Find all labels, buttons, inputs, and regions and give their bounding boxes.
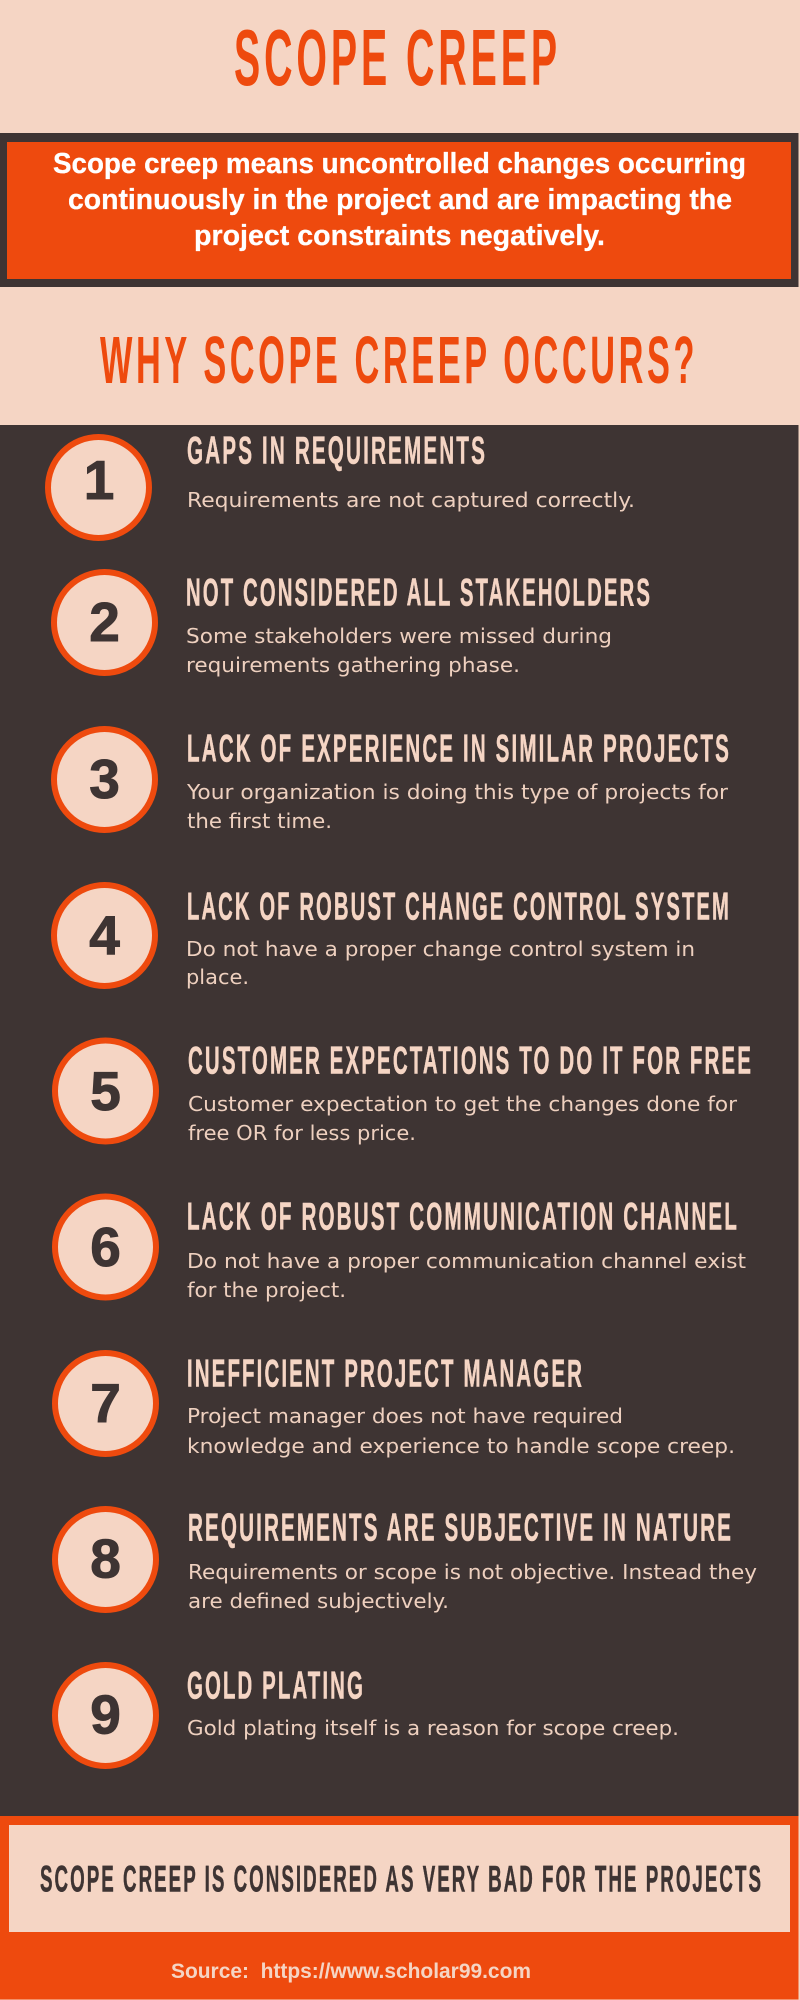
number badge 7	[55, 1353, 156, 1454]
description 5: Customer expectation to get the changes done for	[188, 1092, 738, 1116]
panel: causes	[0, 425, 798, 1816]
item 5	[55, 1039, 753, 1145]
heading 9: GOLD PLATING	[187, 1664, 365, 1707]
item 8	[55, 1506, 757, 1613]
number badge 5	[55, 1040, 156, 1142]
description 1: Requirements are not captured correctly.	[187, 488, 635, 512]
panel: definition: project constraints negatively.	[194, 220, 605, 252]
description 4: Do not have a proper change control system in	[186, 937, 695, 961]
number badge 2	[54, 572, 155, 673]
number badge 4	[54, 885, 155, 986]
number badge 6: 6	[90, 1216, 121, 1278]
number badge 5: 5	[90, 1060, 121, 1122]
description 3	[186, 780, 729, 833]
number badge 1: 1	[84, 449, 114, 511]
number badge 9: 9	[90, 1684, 121, 1746]
item 1	[48, 429, 635, 538]
description 3: Your organization is doing this type of projects for	[186, 780, 729, 804]
description 7: knowledge and experience to handle scope creep.	[187, 1434, 735, 1458]
number badge 8: 8	[90, 1528, 121, 1590]
item 4	[54, 885, 731, 989]
description 7	[187, 1404, 735, 1458]
number badge 4: 4	[89, 904, 120, 966]
description 4: place.	[186, 965, 249, 989]
number badge 7: 7	[90, 1372, 121, 1434]
description 2: Some stakeholders were missed during	[186, 624, 612, 648]
description 3: the first time.	[187, 809, 332, 833]
description 8: Requirements or scope is not objective. Instead they	[188, 1560, 757, 1584]
panel: definition	[0, 133, 798, 287]
panel: definition: continuously in the project and are impacting the	[68, 184, 732, 216]
number badge 2: 2	[89, 591, 120, 653]
description 6	[187, 1249, 746, 1302]
number badge 3: 3	[89, 748, 120, 810]
description 8: are defined subjectively.	[188, 1589, 449, 1613]
panel: definition: Scope creep means uncontrolled changes occurring	[53, 148, 746, 180]
number badge 1	[48, 437, 149, 538]
number badge 3	[54, 729, 155, 830]
heading 1: GAPS IN REQUIREMENTS	[187, 429, 487, 472]
description 6: Do not have a proper communication channel exist	[187, 1249, 746, 1273]
description 5: free OR for less price.	[188, 1121, 416, 1145]
number badge 6	[55, 1196, 156, 1298]
description 4	[186, 937, 695, 989]
description 2: requirements gathering phase.	[186, 653, 520, 677]
description 7: Project manager does not have required	[187, 1404, 623, 1428]
number badge 8	[55, 1509, 156, 1610]
item 9	[55, 1664, 679, 1766]
description 6: for the project.	[187, 1278, 346, 1302]
description 8	[188, 1560, 757, 1613]
description 9: Gold plating itself is a reason for scope creep.	[187, 1716, 679, 1740]
item 2	[54, 571, 652, 677]
description 2	[186, 624, 612, 677]
item 6	[55, 1195, 746, 1302]
description 5	[188, 1092, 738, 1145]
panel: footer	[0, 1816, 798, 2000]
number badge 9	[55, 1665, 156, 1766]
item 7	[55, 1352, 735, 1458]
item 3	[54, 727, 731, 833]
source line: Source: https://www.scholar99.com	[171, 1960, 531, 1983]
